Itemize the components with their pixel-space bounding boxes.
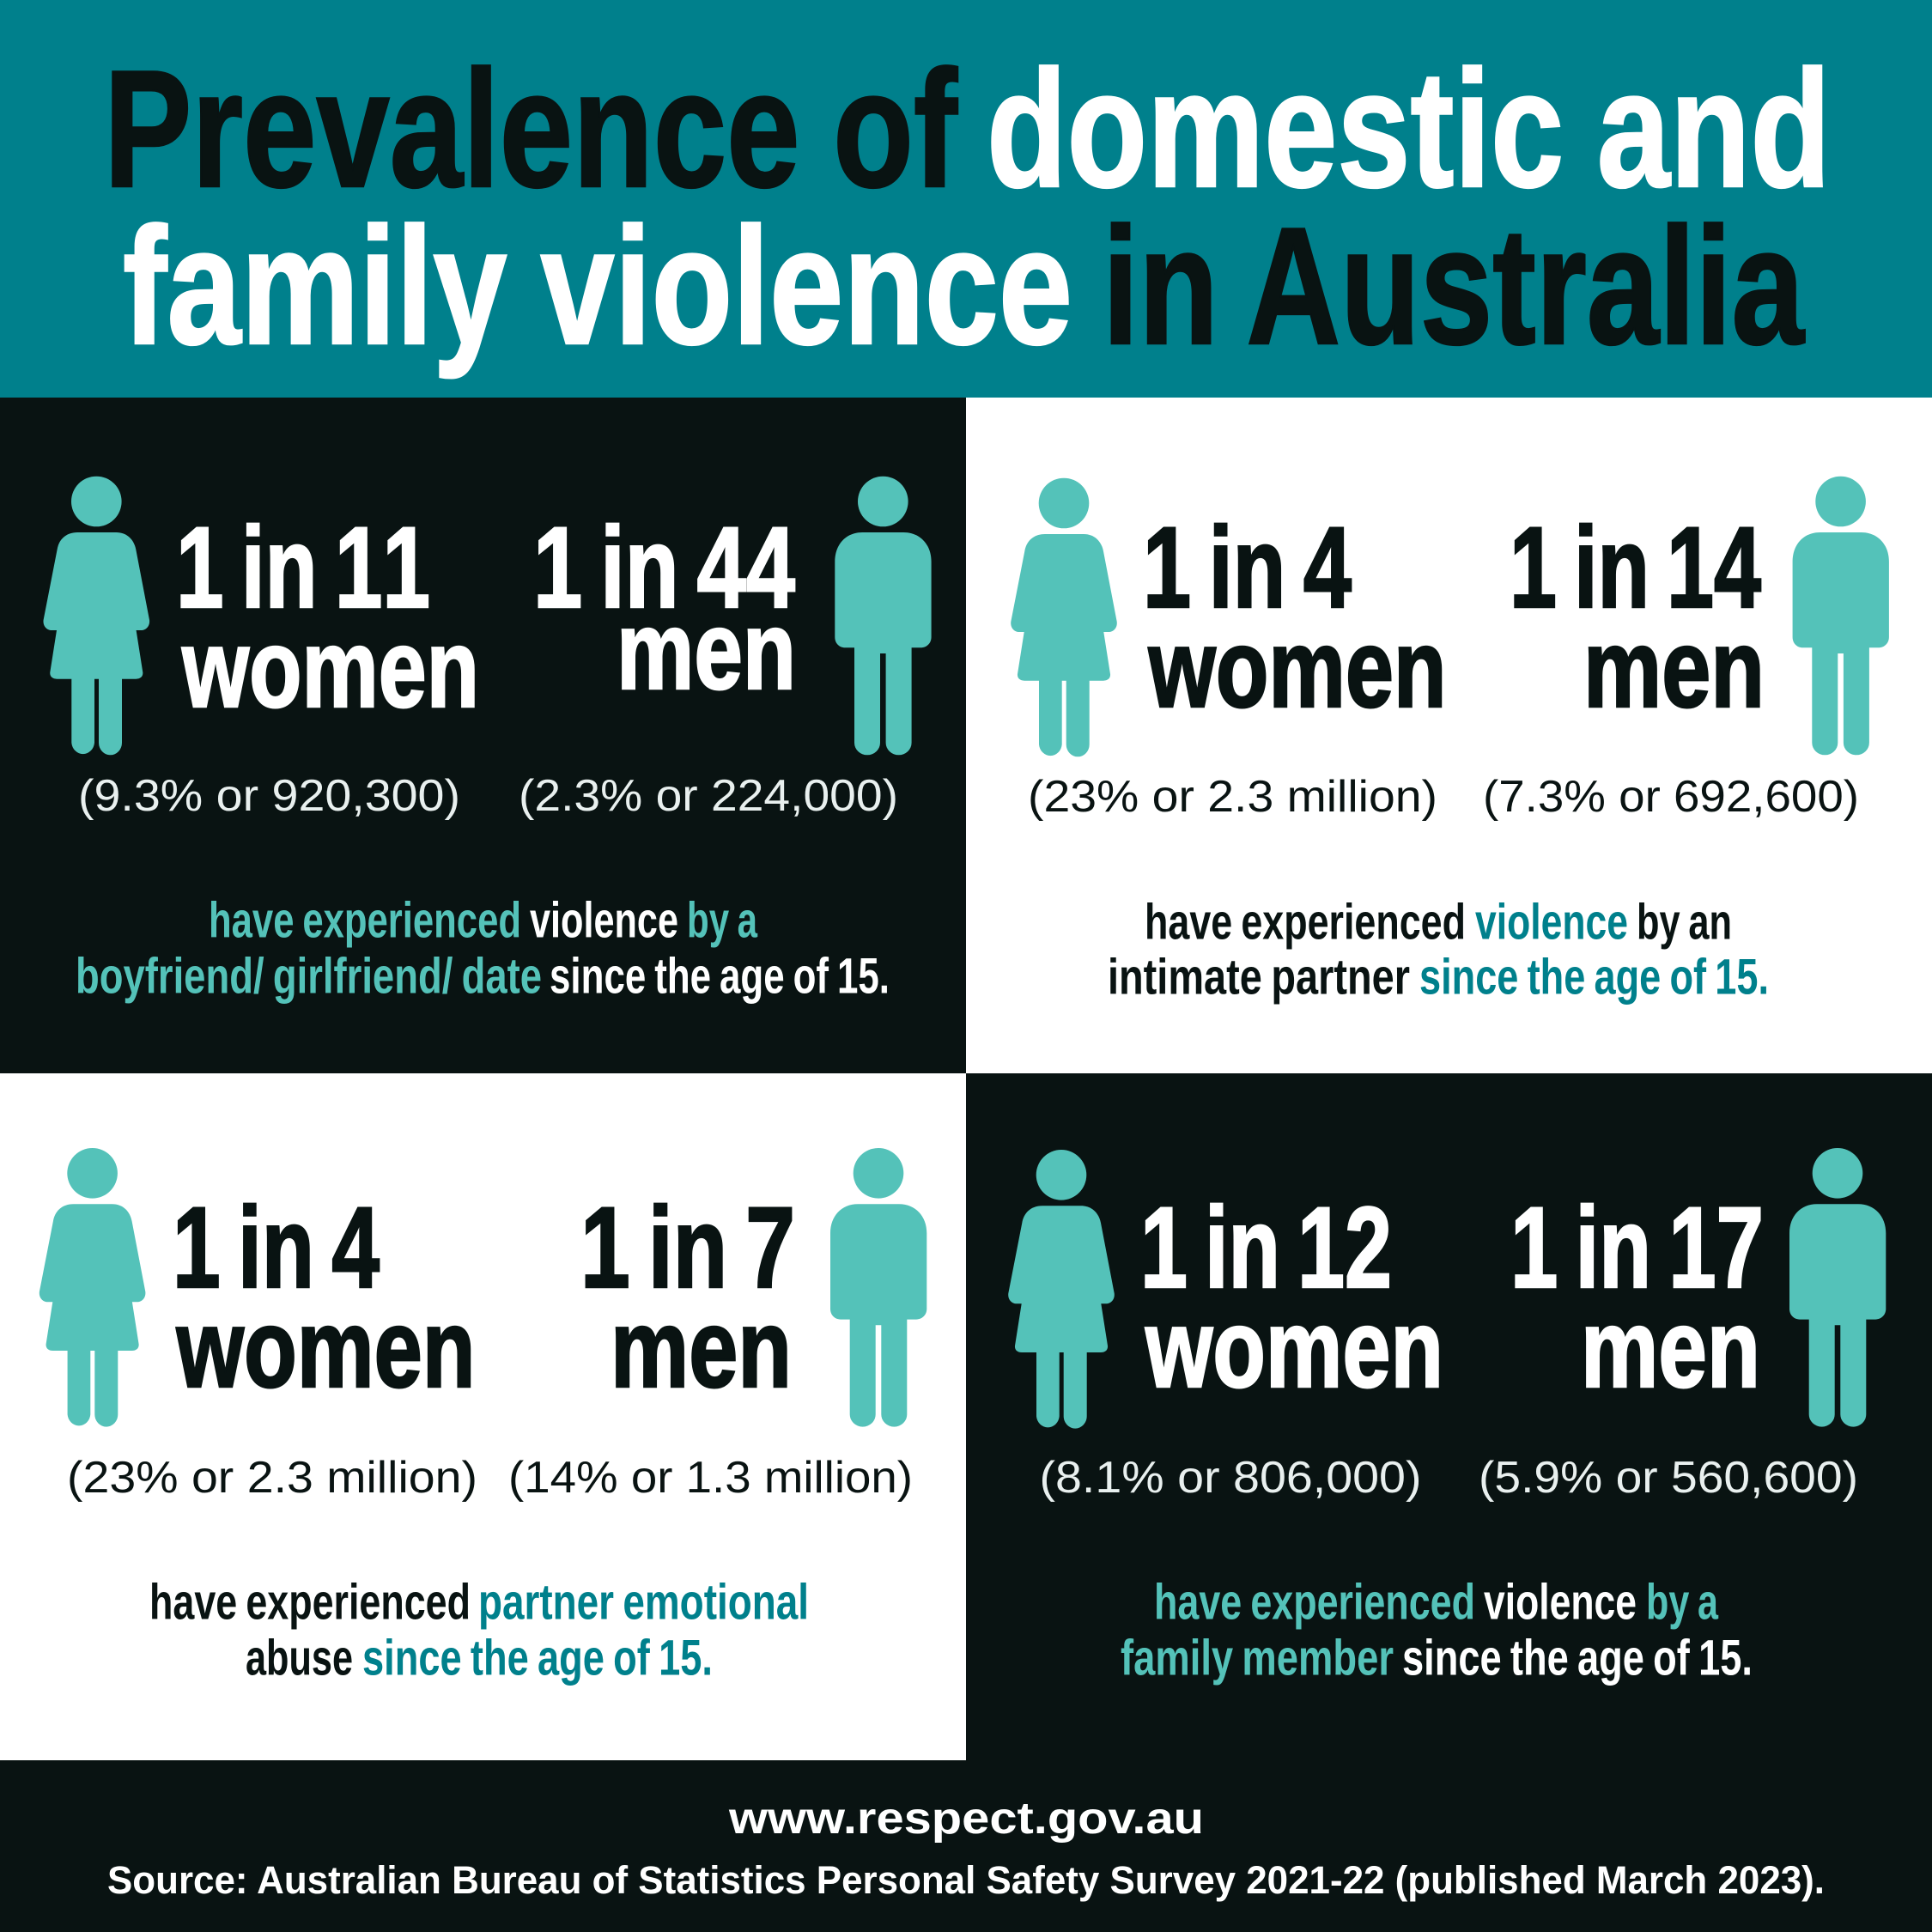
title: Prevalence of bbox=[104, 36, 957, 222]
stat: 1 in 4 women: (23% or 2.3 million) bbox=[1028, 772, 1437, 822]
description text bbox=[149, 1575, 809, 1686]
title bbox=[104, 36, 1831, 380]
stat: 1 in 44 men: 1 in 44 bbox=[533, 504, 795, 632]
description text bbox=[1108, 895, 1769, 1005]
stat: 1 in 12 women: (8.1% or 806,000) bbox=[1039, 1453, 1422, 1503]
source line: Source: Australian Bureau of Statistics Personal Safety Survey 2021-22 (published March 2023). bbox=[107, 1858, 1825, 1902]
panel: boyfriend/girlfriend/date violence bbox=[0, 398, 966, 1073]
icon: woman bbox=[39, 1148, 145, 1427]
stat: 1 in 44 men bbox=[519, 504, 898, 821]
description text: boyfriend/ girlfriend/ date bbox=[76, 948, 542, 1005]
description text: family member bbox=[1121, 1630, 1394, 1686]
stat: 1 in 17 men: 1 in 17 bbox=[1510, 1184, 1764, 1312]
stat: 1 in 14 men: (7.3% or 692,600) bbox=[1483, 772, 1859, 822]
stat: 1 in 7 men: 1 in 7 bbox=[580, 1184, 795, 1312]
description text: violence bbox=[530, 893, 678, 948]
stat: 1 in 14 men bbox=[1483, 504, 1859, 822]
stat: 1 in 4 women: women bbox=[1148, 605, 1446, 731]
icon: woman bbox=[44, 477, 149, 755]
stat: 1 in 12 women bbox=[1039, 1184, 1443, 1503]
stat: 1 in 17 men bbox=[1479, 1184, 1858, 1503]
stat: 1 in 4 women bbox=[67, 1184, 477, 1503]
stat: 1 in 44 men: (2.3% or 224,000) bbox=[519, 771, 898, 821]
stat: 1 in 4 women: 1 in 4 bbox=[1143, 504, 1352, 632]
description text: intimate partner bbox=[1108, 950, 1410, 1005]
description text bbox=[76, 893, 890, 1005]
description text: by an bbox=[1637, 895, 1732, 950]
stat: 1 in 12 women: 1 in 12 bbox=[1140, 1184, 1392, 1312]
description text: violence bbox=[1484, 1575, 1637, 1630]
stat: 1 in 14 men: men bbox=[1583, 605, 1765, 731]
icon: woman bbox=[1008, 1150, 1115, 1429]
icon: woman bbox=[1011, 478, 1117, 756]
icon: man bbox=[1793, 477, 1889, 755]
stat: 1 in 11 women: (9.3% or 920,300) bbox=[78, 771, 460, 821]
stat: 1 in 7 men bbox=[508, 1184, 913, 1503]
icon: man bbox=[835, 477, 932, 755]
stat: 1 in 17 men: (5.9% or 560,600) bbox=[1479, 1453, 1858, 1503]
title: family violence bbox=[123, 193, 1072, 380]
description text: since the age of 15. bbox=[362, 1630, 713, 1686]
description text: have experienced bbox=[1154, 1575, 1475, 1630]
header band bbox=[0, 0, 1932, 398]
stat: 1 in 4 women: (23% or 2.3 million) bbox=[67, 1453, 477, 1503]
stat: 1 in 11 women: 1 in 11 bbox=[176, 504, 430, 632]
stat: 1 in 14 men: 1 in 14 bbox=[1510, 504, 1761, 632]
stat: 1 in 44 men: men bbox=[617, 587, 796, 713]
description text: partner emotional bbox=[478, 1575, 809, 1630]
website url: www.respect.gov.au bbox=[728, 1794, 1204, 1844]
stat: 1 in 7 men: (14% or 1.3 million) bbox=[508, 1453, 913, 1503]
stat: 1 in 4 women: 1 in 4 bbox=[173, 1184, 380, 1312]
description text: by a bbox=[1646, 1575, 1719, 1630]
description text: since the age of 15. bbox=[550, 948, 890, 1005]
description text: by a bbox=[687, 893, 758, 948]
stat: 1 in 11 women: women bbox=[181, 605, 479, 731]
stat: 1 in 17 men: men bbox=[1581, 1285, 1760, 1411]
description text: have experienced bbox=[1145, 895, 1466, 950]
stat: 1 in 7 men: men bbox=[611, 1285, 792, 1411]
description text: abuse bbox=[246, 1630, 353, 1686]
panel: family member violence bbox=[966, 1073, 1932, 1760]
description text: have experienced bbox=[209, 893, 521, 948]
stat: 1 in 4 women: women bbox=[176, 1285, 476, 1411]
description text: have experienced bbox=[149, 1575, 471, 1630]
stat: 1 in 4 women bbox=[1028, 504, 1446, 822]
panel: intimate partner violence bbox=[966, 398, 1932, 1073]
description text: violence bbox=[1475, 895, 1628, 950]
stat: 1 in 12 women: women bbox=[1145, 1285, 1443, 1411]
description text bbox=[1121, 1575, 1753, 1686]
footer bbox=[0, 1760, 1932, 1932]
stat: 1 in 11 women bbox=[78, 504, 479, 821]
panel: partner emotional abuse bbox=[0, 1073, 966, 1760]
icon: man bbox=[1789, 1148, 1886, 1427]
icon: man bbox=[830, 1148, 927, 1427]
description text: since the age of 15. bbox=[1419, 950, 1769, 1005]
description text: since the age of 15. bbox=[1402, 1630, 1753, 1686]
